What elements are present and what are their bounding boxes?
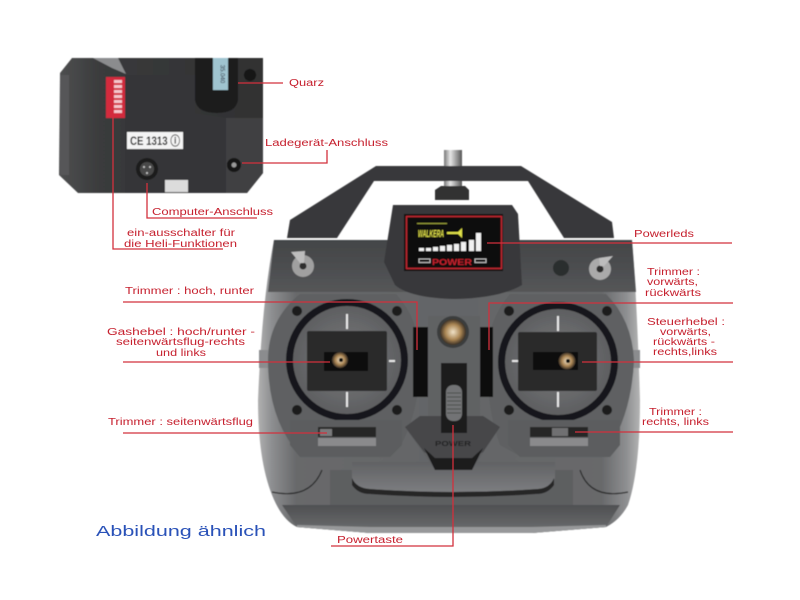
label: CE mark: CE 1313 ⓘ [130, 133, 180, 148]
logo bird in yellow: WALKERA [418, 229, 444, 240]
callout: Trimmer hoch runter [123, 286, 417, 350]
carrying handle [287, 166, 614, 238]
callout: Ladegerät-Anschluss [242, 138, 388, 163]
display housing [384, 205, 522, 299]
callout: Trimmer vorwärts rückwärts [489, 267, 733, 350]
display panel [404, 214, 503, 271]
battery bars [419, 233, 481, 251]
callout: Gashebel: Gashebel : hoch/runter - [107, 327, 255, 338]
illustration: transmitter [258, 150, 640, 533]
power caption on body: POWER [435, 441, 471, 448]
callout: Powertaste: Powertaste [337, 535, 404, 546]
caption: Abbildung ähnlich: Abbildung ähnlich [96, 523, 266, 540]
callout: Computer-Anschluss [147, 183, 273, 218]
power label: POWER [432, 258, 472, 267]
icon: crystal holder with quartz label: 35.040 [218, 65, 224, 84]
callout: Trimmer rechts links: Trimmer : [649, 407, 702, 418]
left trim slider [290, 420, 402, 457]
icon: screw hole [244, 69, 256, 81]
centre column [405, 316, 500, 470]
left gimbal [259, 294, 420, 455]
callout: Quarz [238, 78, 324, 89]
icon: red DIP switches [106, 77, 125, 118]
callout: Gashebel [107, 327, 330, 362]
round button [553, 260, 569, 276]
callout: Gashebel: und links [156, 348, 206, 359]
callout: Trimmer seitenwärtsflug: Trimmer : seitenwärtsflug [108, 417, 253, 428]
icon: charger socket [227, 158, 241, 172]
icon: computer port [136, 158, 158, 180]
icon: crystal holder with quartz label [195, 58, 238, 113]
label: CE mark [127, 132, 183, 149]
callout: Trimmer vorwärts rückwärts: Trimmer : [647, 267, 700, 278]
power slider [441, 363, 467, 433]
callout: Trimmer vorwärts rückwärts: rückwärts [645, 288, 701, 299]
callout: Steuerhebel: rechts,links [653, 347, 717, 358]
callout: Quarz: Quarz [289, 78, 324, 89]
callout: Trimmer hoch runter: Trimmer : hoch, runter [125, 286, 255, 297]
right gimbal [487, 294, 640, 455]
callout: Steuerhebel: vorwärts, [660, 327, 711, 338]
callout: Steuerhebel: rückwärts - [653, 337, 715, 348]
right trim slider [508, 420, 620, 457]
panel: inset photo of transmitter back [59, 58, 263, 193]
callout: Steuerhebel [582, 317, 733, 362]
callout: Ladegerät-Anschluss: Ladegerät-Anschluss [265, 138, 388, 149]
label: small serial sticker [165, 180, 188, 192]
transmitter body [258, 240, 640, 533]
callout: Powerleds: Powerleds [634, 229, 694, 240]
callout: ein-ausschalter: ein-ausschalter für [127, 228, 236, 239]
callout: ein-ausschalter: die Heli-Funktionen [124, 239, 237, 250]
right switch [589, 256, 613, 280]
callout: Computer-Anschluss: Computer-Anschluss [152, 207, 273, 218]
callout: Trimmer vorwärts rückwärts: vorwärts, [647, 277, 698, 288]
callout: ein-ausschalter [113, 117, 237, 250]
callout: Steuerhebel: Steuerhebel : [647, 317, 725, 328]
callout: Trimmer rechts links: rechts, links [642, 417, 709, 428]
centre knob [437, 316, 469, 348]
antenna [435, 150, 469, 200]
left switch [291, 251, 314, 277]
callout: Powertaste [331, 425, 453, 546]
callout: Gashebel: seitenwärtsflug-rechts [116, 337, 245, 348]
callout: Trimmer rechts links [575, 407, 733, 432]
